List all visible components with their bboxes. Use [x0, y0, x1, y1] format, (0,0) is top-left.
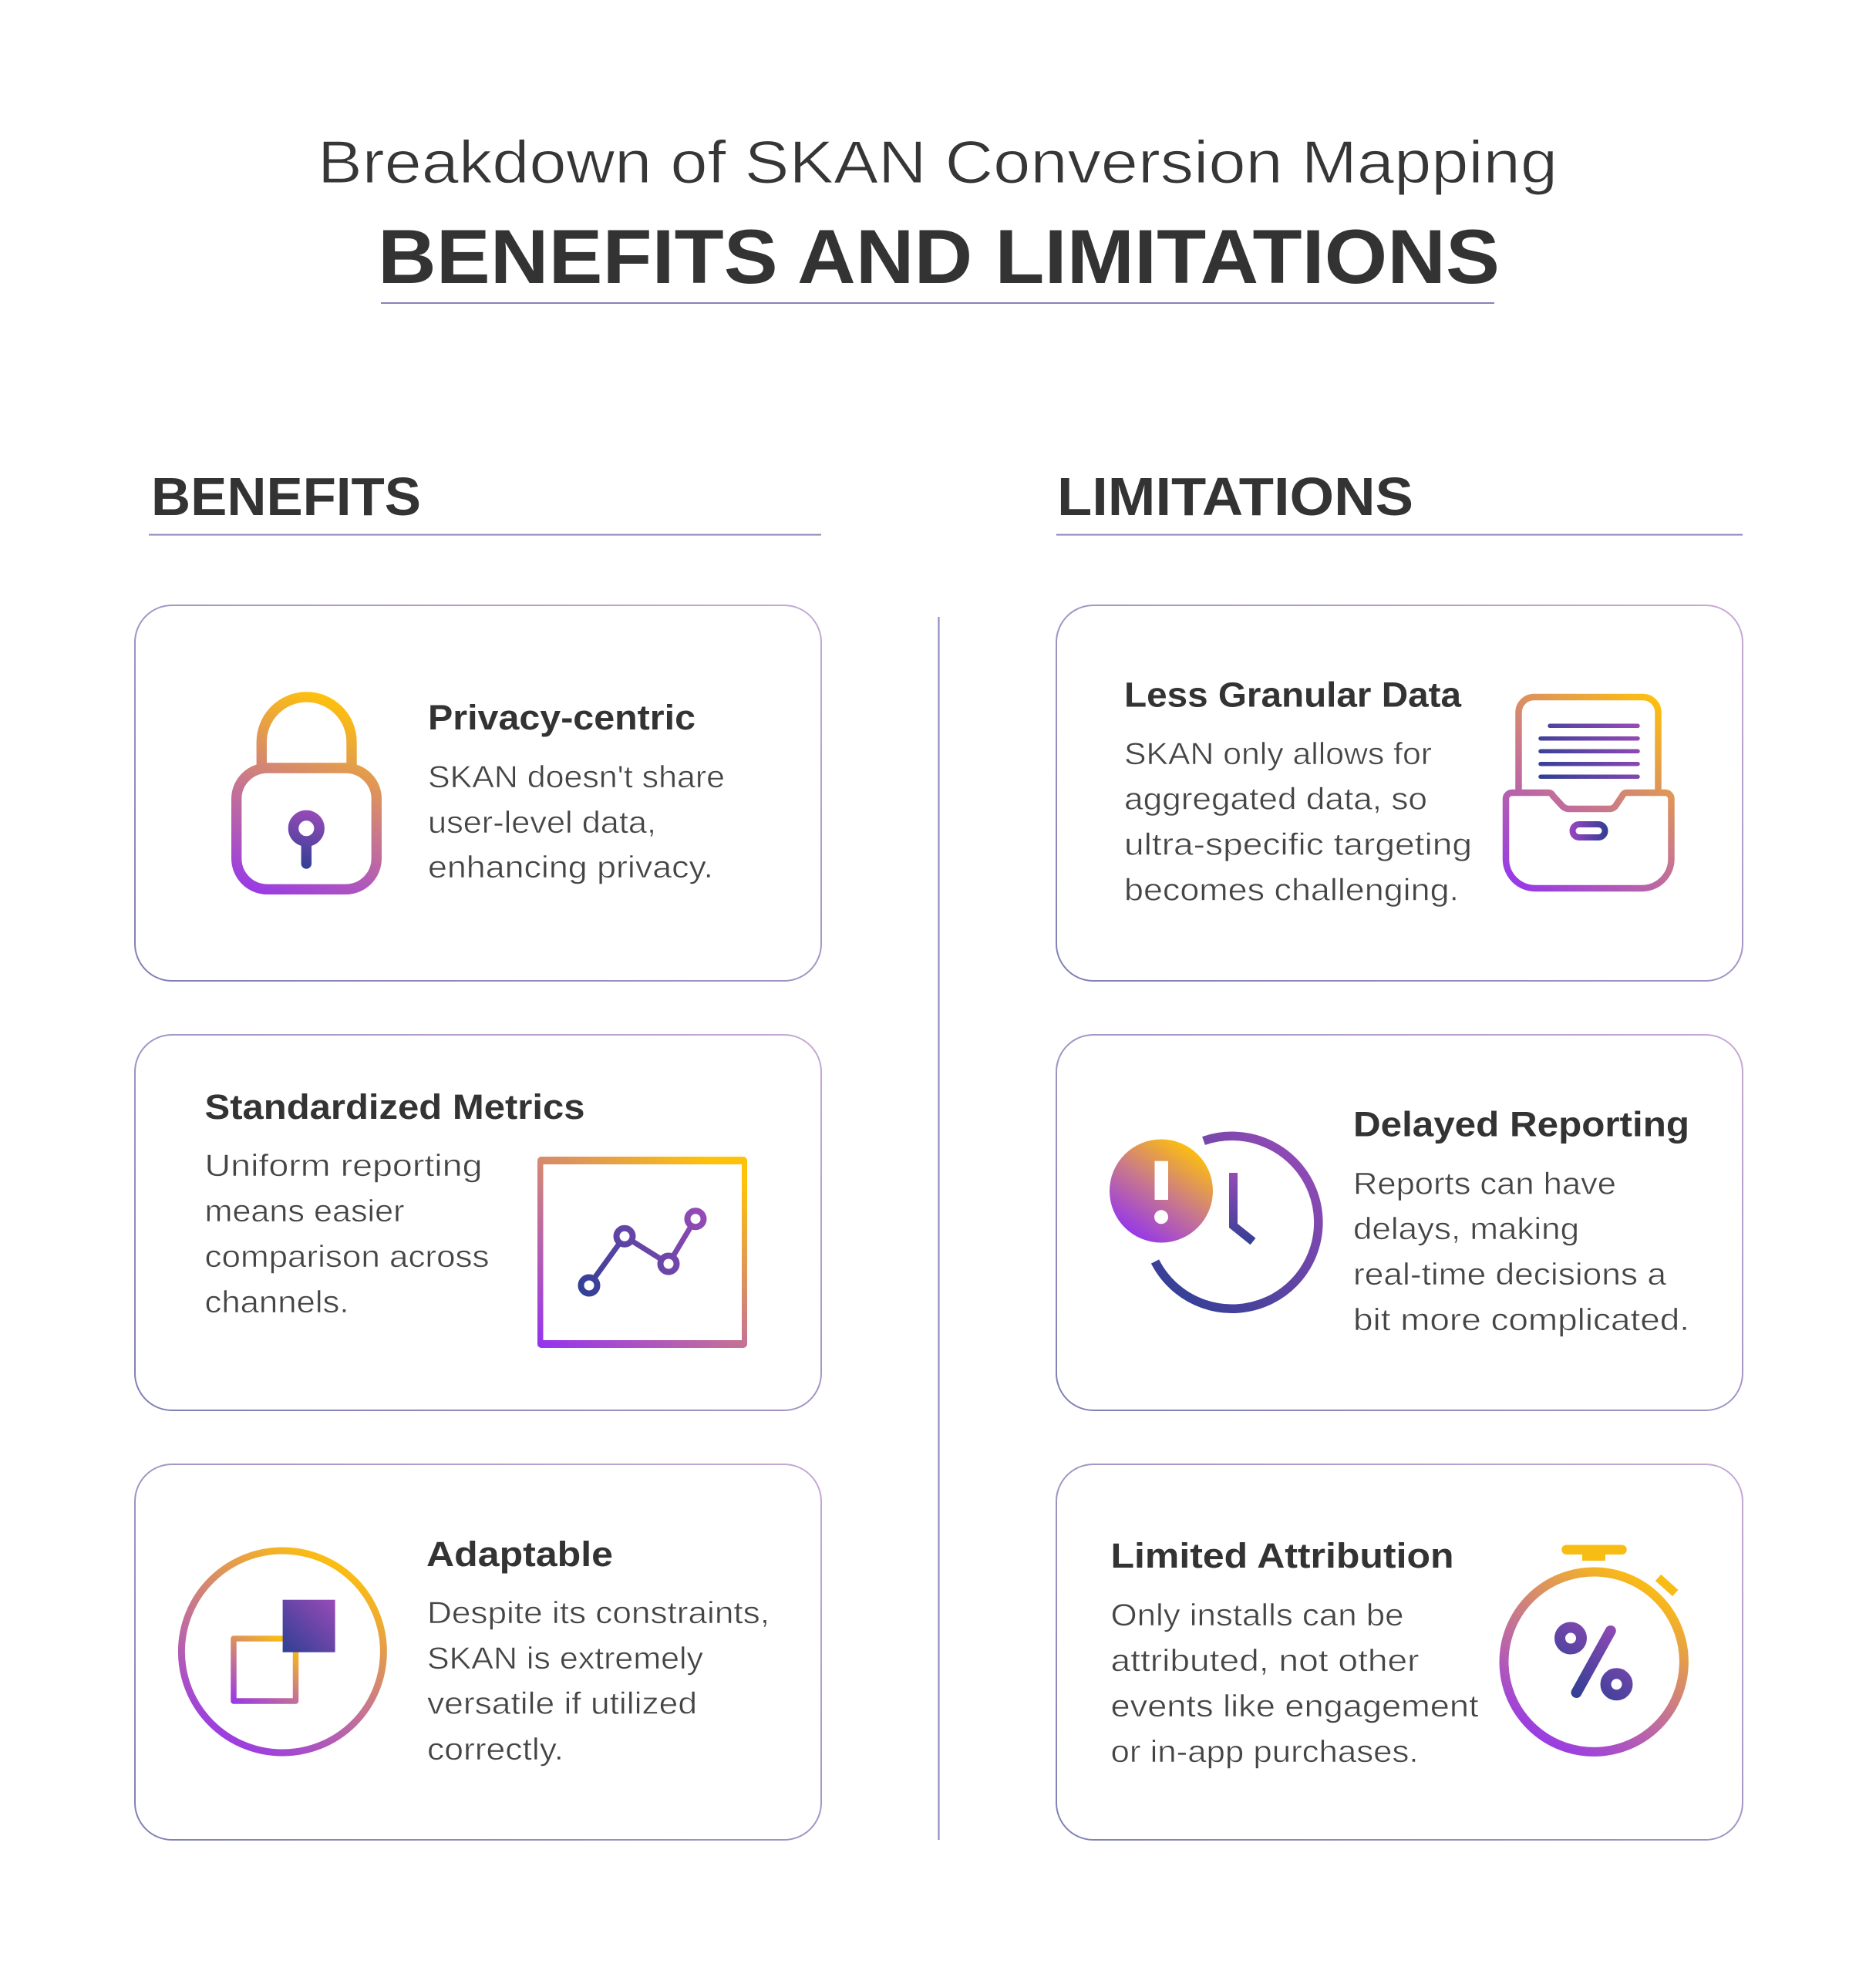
card body: events like engagement — [1110, 1689, 1479, 1723]
panel: privacy-centric — [135, 605, 821, 981]
card body: attributed, not other — [1110, 1644, 1419, 1678]
card body: versatile if utilized — [427, 1687, 697, 1721]
card body — [205, 1149, 489, 1319]
card body: comparison across — [205, 1240, 489, 1274]
card body: Despite its constraints, — [427, 1596, 770, 1630]
card title: Limited Attribution — [1110, 1536, 1454, 1575]
card title: Privacy-centric — [428, 698, 696, 737]
title line: subtitle: Breakdown of SKAN Conversion Mapping — [318, 128, 1558, 196]
card body — [1353, 1167, 1689, 1337]
title underline — [381, 302, 1494, 304]
panel: delayed reporting — [1056, 1035, 1743, 1410]
panel: standardized metrics — [135, 1035, 821, 1410]
card body — [1124, 737, 1472, 907]
icon: overlapping squares in circle — [181, 1551, 383, 1753]
panel: adaptable — [135, 1464, 821, 1840]
card body — [427, 1596, 770, 1767]
icon: stopwatch with percent — [1504, 1550, 1684, 1752]
card body: SKAN only allows for — [1124, 737, 1432, 771]
title — [318, 128, 1558, 303]
card body: bit more complicated. — [1353, 1303, 1689, 1337]
card body: enhancing privacy. — [428, 851, 713, 884]
heading: limitations: LIMITATIONS — [1057, 467, 1413, 527]
card body: Uniform reporting — [205, 1149, 483, 1183]
card body — [1110, 1598, 1479, 1769]
card body: or in-app purchases. — [1110, 1735, 1419, 1769]
card body: ultra-specific targeting — [1124, 828, 1472, 862]
card body: Only installs can be — [1110, 1598, 1403, 1632]
card body: correctly. — [427, 1733, 564, 1767]
card title: Adaptable — [426, 1534, 613, 1574]
card body: Reports can have — [1353, 1167, 1616, 1201]
card body: means easier — [205, 1194, 404, 1228]
card body: channels. — [205, 1285, 349, 1319]
heading: benefits: BENEFITS — [151, 467, 421, 527]
card title: Standardized Metrics — [205, 1087, 584, 1127]
card body: aggregated data, so — [1124, 782, 1427, 816]
icon: line chart in frame — [537, 1157, 747, 1348]
panel: limited attribution — [1056, 1464, 1743, 1840]
card body: SKAN doesn't share — [428, 760, 725, 794]
card body: becomes challenging. — [1124, 873, 1459, 907]
panel: less granular data — [1056, 605, 1743, 981]
title line: main heading: BENEFITS AND LIMITATIONS — [378, 214, 1500, 299]
card body: SKAN is extremely — [427, 1642, 703, 1676]
card body: user-level data, — [428, 806, 656, 840]
card body: real-time decisions a — [1353, 1258, 1667, 1292]
card body — [428, 760, 725, 884]
card body: delays, making — [1353, 1212, 1579, 1246]
icon: padlock — [237, 697, 376, 889]
card title: Delayed Reporting — [1353, 1104, 1689, 1144]
icon: document in tray — [1506, 697, 1672, 888]
card title: Less Granular Data — [1124, 675, 1462, 714]
icon: clock with alert — [1110, 1136, 1319, 1309]
